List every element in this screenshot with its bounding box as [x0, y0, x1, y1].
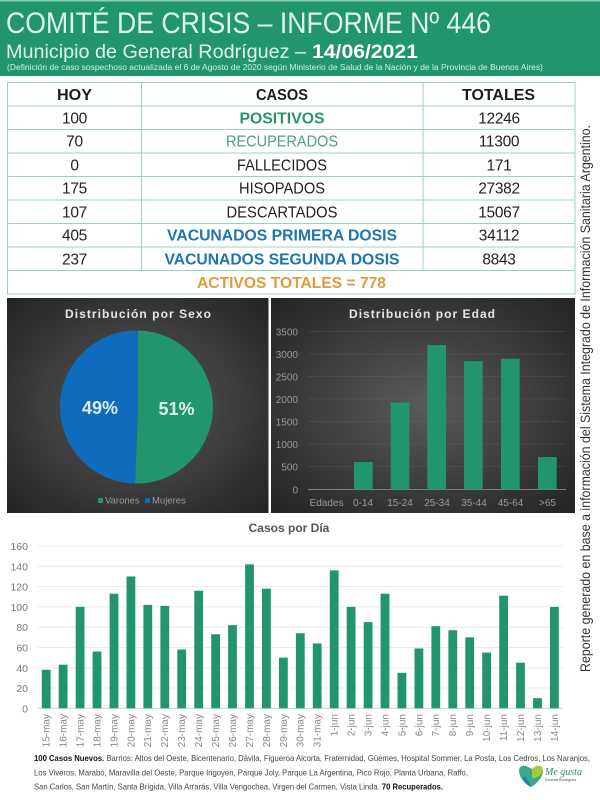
heading: Distribución por Edad — [349, 307, 495, 321]
row: hisopados: 27382 — [478, 180, 520, 198]
active cases total: ACTIVOS TOTALES = 778 — [197, 275, 386, 292]
age axis labels — [276, 328, 556, 509]
date labels: 10-jun — [482, 714, 493, 742]
date labels: 13-jun — [533, 714, 544, 742]
footer text: neighbourhoods: Los Viveros, Marabó, Maravilla del Oeste, Parque Irigoyen, Parque Joly, Parque La Argentina, Pico Rojo, Planta Urbana, Raffo, — [34, 768, 468, 778]
gridlines — [308, 332, 566, 466]
date labels: 26-may — [228, 714, 239, 747]
report date: 14/06/2021 — [312, 41, 418, 63]
date labels: 20-may — [126, 714, 137, 747]
header banner — [0, 0, 600, 76]
date labels: 19-may — [109, 714, 120, 747]
heading: Distribución por Sexo — [65, 307, 211, 321]
y axis labels: 40 — [16, 663, 28, 675]
row: descartados — [62, 204, 520, 222]
date labels: 3-jun — [364, 714, 374, 736]
y axis labels: 100 — [10, 602, 28, 614]
age axis labels: 35-44 — [461, 498, 487, 509]
date labels: 5-jun — [397, 714, 408, 736]
row: vacunados primera dosis: 405 — [62, 228, 87, 244]
y axis labels — [10, 541, 28, 715]
age axis labels: 0 — [292, 486, 298, 496]
heading: Casos por Día — [249, 521, 330, 535]
date labels: 24-may — [194, 714, 205, 747]
row: positivos — [62, 110, 520, 128]
row: fallecidos: FALLECIDOS — [237, 158, 327, 174]
age axis labels: >65 — [539, 498, 556, 509]
date labels: 8-jun — [448, 714, 459, 736]
row: descartados: DESCARTADOS — [226, 204, 338, 222]
table header: CASOS — [256, 87, 308, 104]
date labels: 21-may — [143, 714, 154, 747]
table header: TOTALES — [462, 87, 535, 104]
age axis labels: 45-64 — [498, 498, 524, 509]
row: vacunados segunda dosis — [62, 252, 516, 268]
row: hisopados: HISOPADOS — [239, 180, 325, 198]
legend — [98, 496, 186, 506]
logo: Me gusta — [519, 766, 582, 787]
table header — [57, 87, 535, 104]
row: positivos: 100 — [62, 110, 88, 128]
logo: Me gusta: General Rodríguez — [545, 778, 576, 782]
row: vacunados primera dosis: 34112 — [479, 228, 519, 244]
age bars — [354, 345, 557, 490]
y axis labels: 80 — [16, 622, 28, 634]
row: descartados: 107 — [62, 204, 87, 222]
date labels: 14-jun — [550, 714, 561, 742]
date labels: 6-jun — [414, 714, 425, 736]
date labels: 30-may — [296, 714, 307, 747]
age axis labels: 0-14 — [353, 498, 373, 509]
pie chart — [60, 330, 213, 484]
date labels: 18-may — [92, 714, 103, 747]
y axis labels: 120 — [10, 582, 28, 594]
panel: distribution by age — [271, 298, 575, 513]
row: recuperados: 11300 — [479, 134, 520, 150]
footer text: neighbourhoods: San Carlos, San Martín, Santa Brígida, Villa Arrarás, Villa Vengochea, Virgen del Carmen, Vista Linda. 70 Recuperados. — [34, 782, 443, 792]
date labels: 9-jun — [465, 714, 476, 736]
row: recuperados: RECUPERADOS — [226, 134, 338, 150]
title: COMITÉ DE CRISIS – INFORME Nº 446 — [6, 7, 491, 40]
age axis labels: 25-34 — [424, 498, 450, 509]
row: vacunados segunda dosis: VACUNADOS SEGUNDA DOSIS — [164, 252, 400, 268]
age axis labels: 1000 — [276, 440, 298, 451]
legend: Varones — [105, 496, 140, 506]
date labels: 23-may — [177, 714, 188, 747]
date labels: 28-may — [262, 714, 273, 747]
date labels: 22-may — [160, 714, 171, 747]
row: recuperados: 70 — [66, 134, 83, 150]
row: recuperados — [66, 134, 520, 150]
row: vacunados primera dosis: VACUNADOS PRIMERA DOSIS — [167, 228, 397, 244]
y axis labels: 140 — [10, 561, 28, 573]
date labels: 15-may — [42, 714, 52, 747]
age axis labels: 15-24 — [387, 498, 413, 509]
date labels: 7-jun — [431, 714, 442, 736]
y axis labels: 160 — [10, 541, 28, 553]
date labels: 17-may — [76, 714, 86, 747]
age axis labels: 3000 — [276, 350, 298, 361]
date labels: 16-may — [58, 714, 70, 747]
date labels: 2-jun — [346, 714, 358, 736]
footer text: neighbourhoods — [34, 753, 590, 792]
date labels — [42, 714, 561, 747]
date labels: 12-jun — [516, 714, 527, 742]
logo: Me gusta: Me gusta — [544, 767, 582, 778]
age axis labels: 500 — [281, 462, 298, 474]
age axis labels: 2000 — [276, 395, 298, 406]
legend: Mujeres — [152, 496, 186, 506]
age axis labels: Edades — [310, 498, 343, 509]
vertical source note: Reporte generado en base a información del Sistema Integrado de Información Sanitaria Argentino. — [578, 125, 593, 672]
date labels: 11-jun — [499, 714, 510, 741]
date labels: 27-may — [245, 714, 256, 747]
row: descartados: 15067 — [478, 204, 520, 222]
date labels: 29-may — [279, 714, 290, 747]
case definition note: (Definición de caso sospechoso actualizada el 6 de Agosto de 2020 según Ministerio de Salud de la Nación y de la Provincia de Buenos Aires) — [7, 62, 543, 72]
y axis labels: 60 — [16, 642, 28, 654]
age axis labels: 3500 — [276, 328, 298, 338]
date labels: 25-may — [211, 714, 222, 747]
row: positivos: POSITIVOS — [240, 110, 324, 128]
date labels: 31-may — [313, 714, 324, 747]
date labels: 1-jun — [330, 714, 341, 736]
panel: cases per day — [10, 521, 563, 747]
row: fallecidos: 0 — [70, 158, 79, 174]
row: vacunados segunda dosis: 8843 — [482, 252, 516, 268]
pie chart: 49% — [82, 398, 118, 418]
y axis labels: 0 — [22, 703, 28, 715]
row: fallecidos — [70, 158, 511, 174]
date labels: 4-jun — [380, 714, 391, 736]
row: fallecidos: 171 — [487, 158, 511, 174]
age axis labels: 1500 — [276, 418, 298, 428]
table header: HOY — [57, 87, 93, 104]
age axis labels: 2500 — [276, 372, 298, 384]
row: hisopados — [62, 180, 520, 198]
row: positivos: 12246 — [478, 110, 520, 128]
panel: cases table — [8, 82, 575, 294]
y axis labels: 20 — [16, 683, 28, 695]
daily bars — [42, 564, 559, 708]
subtitle: Municipio de General Rodríguez – — [6, 41, 306, 63]
pie chart: 51% — [158, 399, 195, 419]
row: vacunados primera dosis — [62, 228, 519, 244]
row: vacunados segunda dosis: 237 — [62, 252, 87, 268]
row: hisopados: 175 — [62, 180, 87, 198]
panel: distribution by sex — [7, 298, 268, 513]
gridlines — [38, 546, 563, 688]
